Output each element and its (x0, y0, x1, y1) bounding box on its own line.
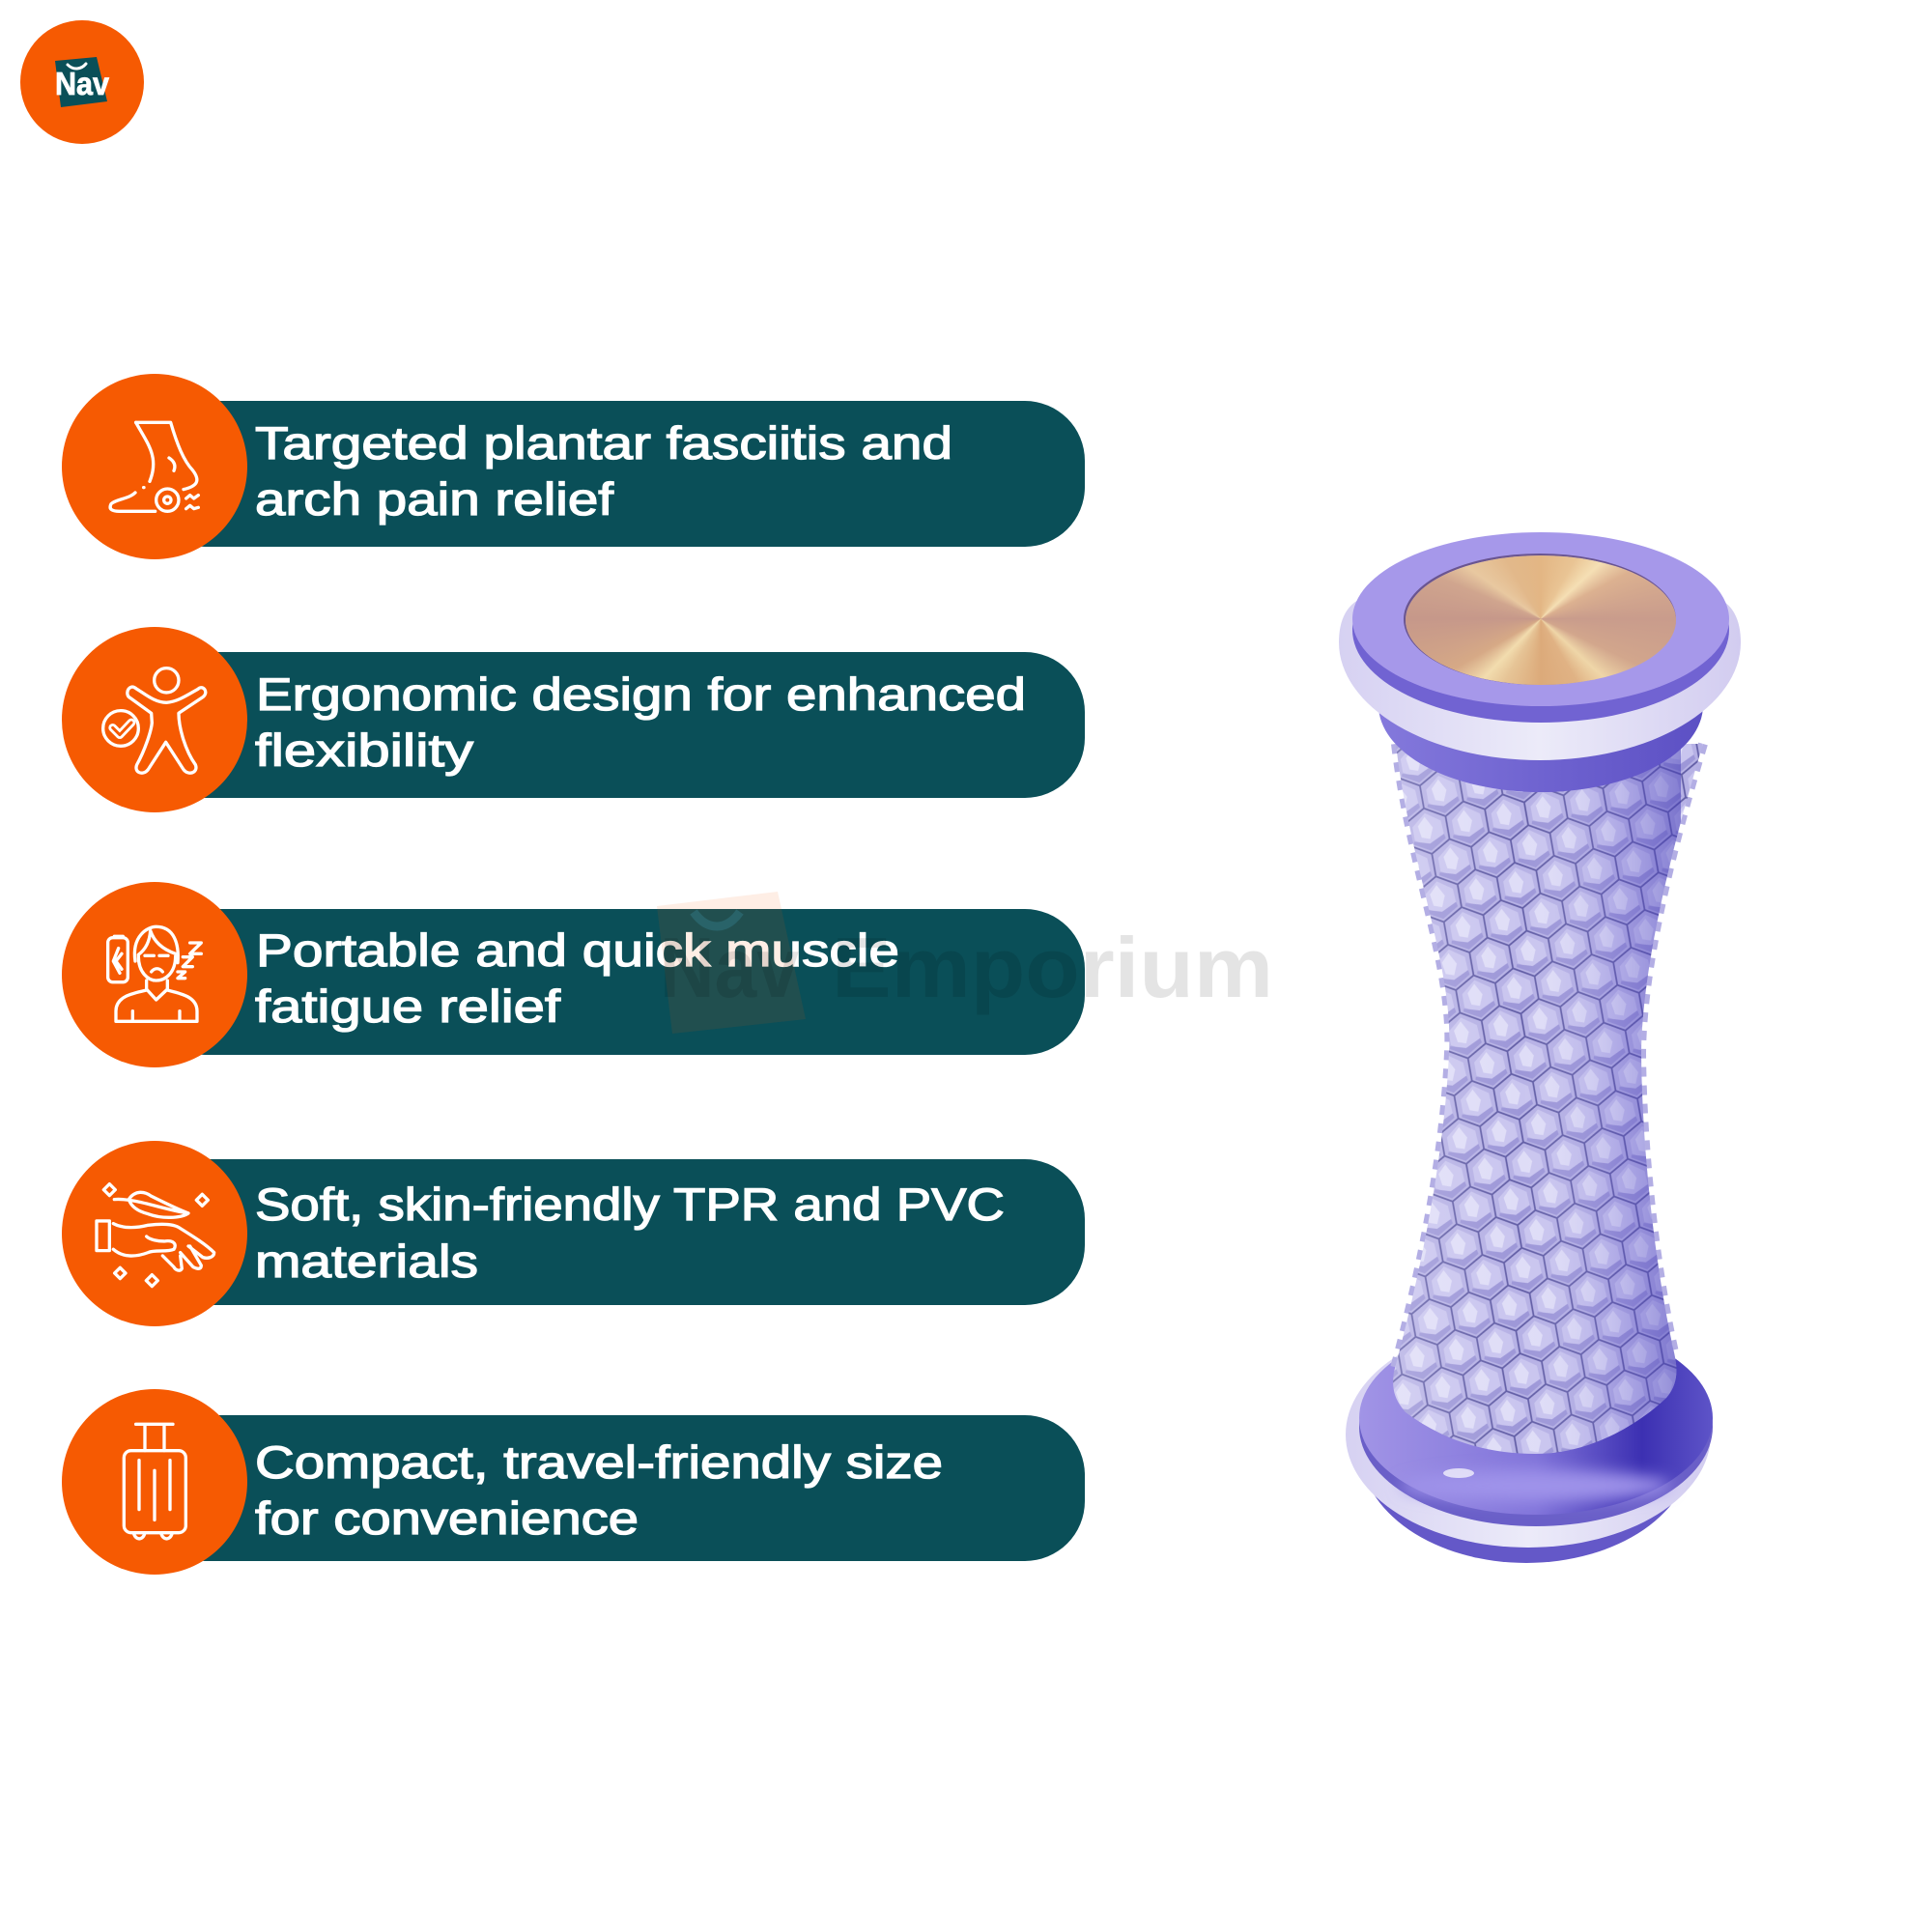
feature row 1: arch pain relief (255, 473, 614, 525)
feature row 4: materials (255, 1236, 478, 1287)
roller hexagon texture body (1393, 744, 1703, 1454)
roller spiky silhouette (1394, 744, 1703, 1372)
feature row 1 (62, 374, 1085, 559)
feature row 2 (62, 627, 1085, 812)
feature row 5: Compact, travel-friendly size (255, 1436, 943, 1488)
roller base (1346, 1321, 1713, 1563)
watermark: Nav Emporium: Nav (660, 920, 799, 1015)
logo badge (20, 20, 144, 144)
icon: flexible person with check (103, 668, 206, 773)
feature row 2: Ergonomic design for enhanced (256, 668, 1026, 720)
feature row 3: fatigue relief (255, 980, 561, 1032)
feature row 2: flexibility (255, 724, 474, 776)
feature row 4 (62, 1141, 1085, 1326)
feature row 5: for convenience (255, 1492, 639, 1544)
feature row 1: Targeted plantar fasciitis and (255, 417, 952, 469)
feature row 3: Portable and quick muscle (256, 924, 899, 976)
feature row 4: Soft, skin-friendly TPR and PVC (255, 1179, 1005, 1230)
icon: suitcase (124, 1424, 185, 1539)
product: copper top plate (1406, 555, 1676, 685)
watermark: Nav Emporium: Emporium (832, 920, 1273, 1015)
watermark: Nav Emporium (657, 892, 1273, 1034)
icon: tired person with low battery (108, 926, 201, 1021)
feature row 5 (62, 1389, 1085, 1575)
logo badge: Nav (55, 66, 110, 101)
feature row 3 (62, 882, 1085, 1067)
icon: feather over hand (97, 1184, 214, 1287)
product: massage roller (1339, 532, 1741, 1563)
icon: foot with heel pain (110, 422, 198, 511)
roller top collar (1339, 532, 1741, 792)
